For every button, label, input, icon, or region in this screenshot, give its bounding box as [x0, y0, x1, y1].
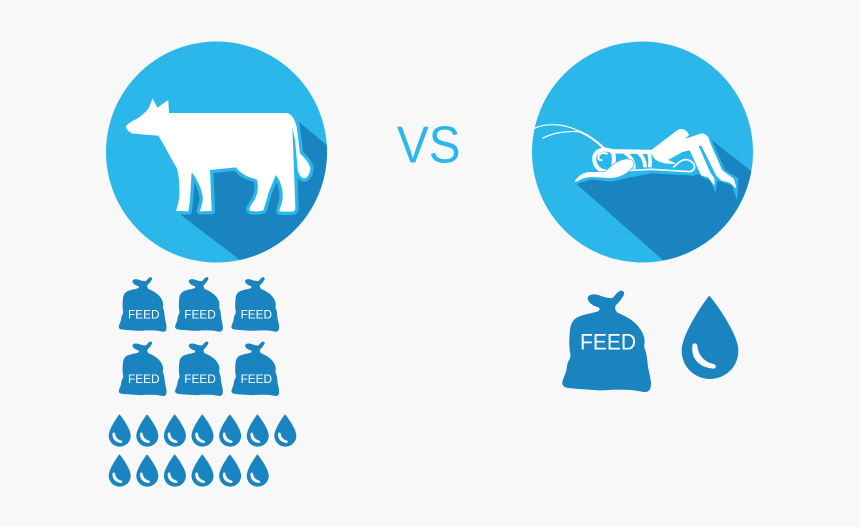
feed bag 4	[119, 341, 167, 396]
cow long shadow	[181, 122, 335, 264]
feed bag 3	[231, 277, 279, 332]
cricket head	[594, 150, 614, 171]
cricket resources: one feed bag: FEED	[580, 329, 636, 354]
cow circle background	[106, 42, 327, 262]
feed bag 1	[119, 277, 167, 332]
cow resources: thirteen water drops	[109, 414, 296, 487]
cricket body	[612, 145, 657, 158]
feed bag 5: FEED	[184, 372, 216, 386]
cow resources: six feed bags	[119, 277, 279, 396]
cricket resources: one feed bag	[562, 291, 651, 392]
infographic: cow vs cricket resource comparison	[106, 42, 753, 487]
icon: cricket	[534, 125, 738, 201]
heading: VS: VS	[397, 116, 460, 174]
panel: cricket	[532, 42, 760, 262]
feed bag 4: FEED	[128, 372, 160, 386]
cricket light outline	[575, 128, 738, 201]
icon: cow	[126, 98, 310, 212]
feed bag 2: FEED	[184, 308, 216, 322]
cricket long shadow	[576, 140, 760, 262]
cricket front leg	[574, 159, 634, 182]
feed bag 3: FEED	[241, 308, 272, 322]
feed bag 6: FEED	[241, 372, 272, 386]
panel: cow	[106, 42, 335, 264]
cricket hind leg	[652, 130, 736, 187]
cricket resources: one water drop	[682, 296, 738, 379]
feed bag 6	[231, 341, 279, 396]
cricket antennae	[534, 125, 606, 149]
feed bag 2	[175, 277, 223, 332]
cricket circle background	[532, 42, 753, 262]
feed bag 1: FEED	[128, 308, 160, 322]
feed bag 5	[175, 341, 223, 396]
